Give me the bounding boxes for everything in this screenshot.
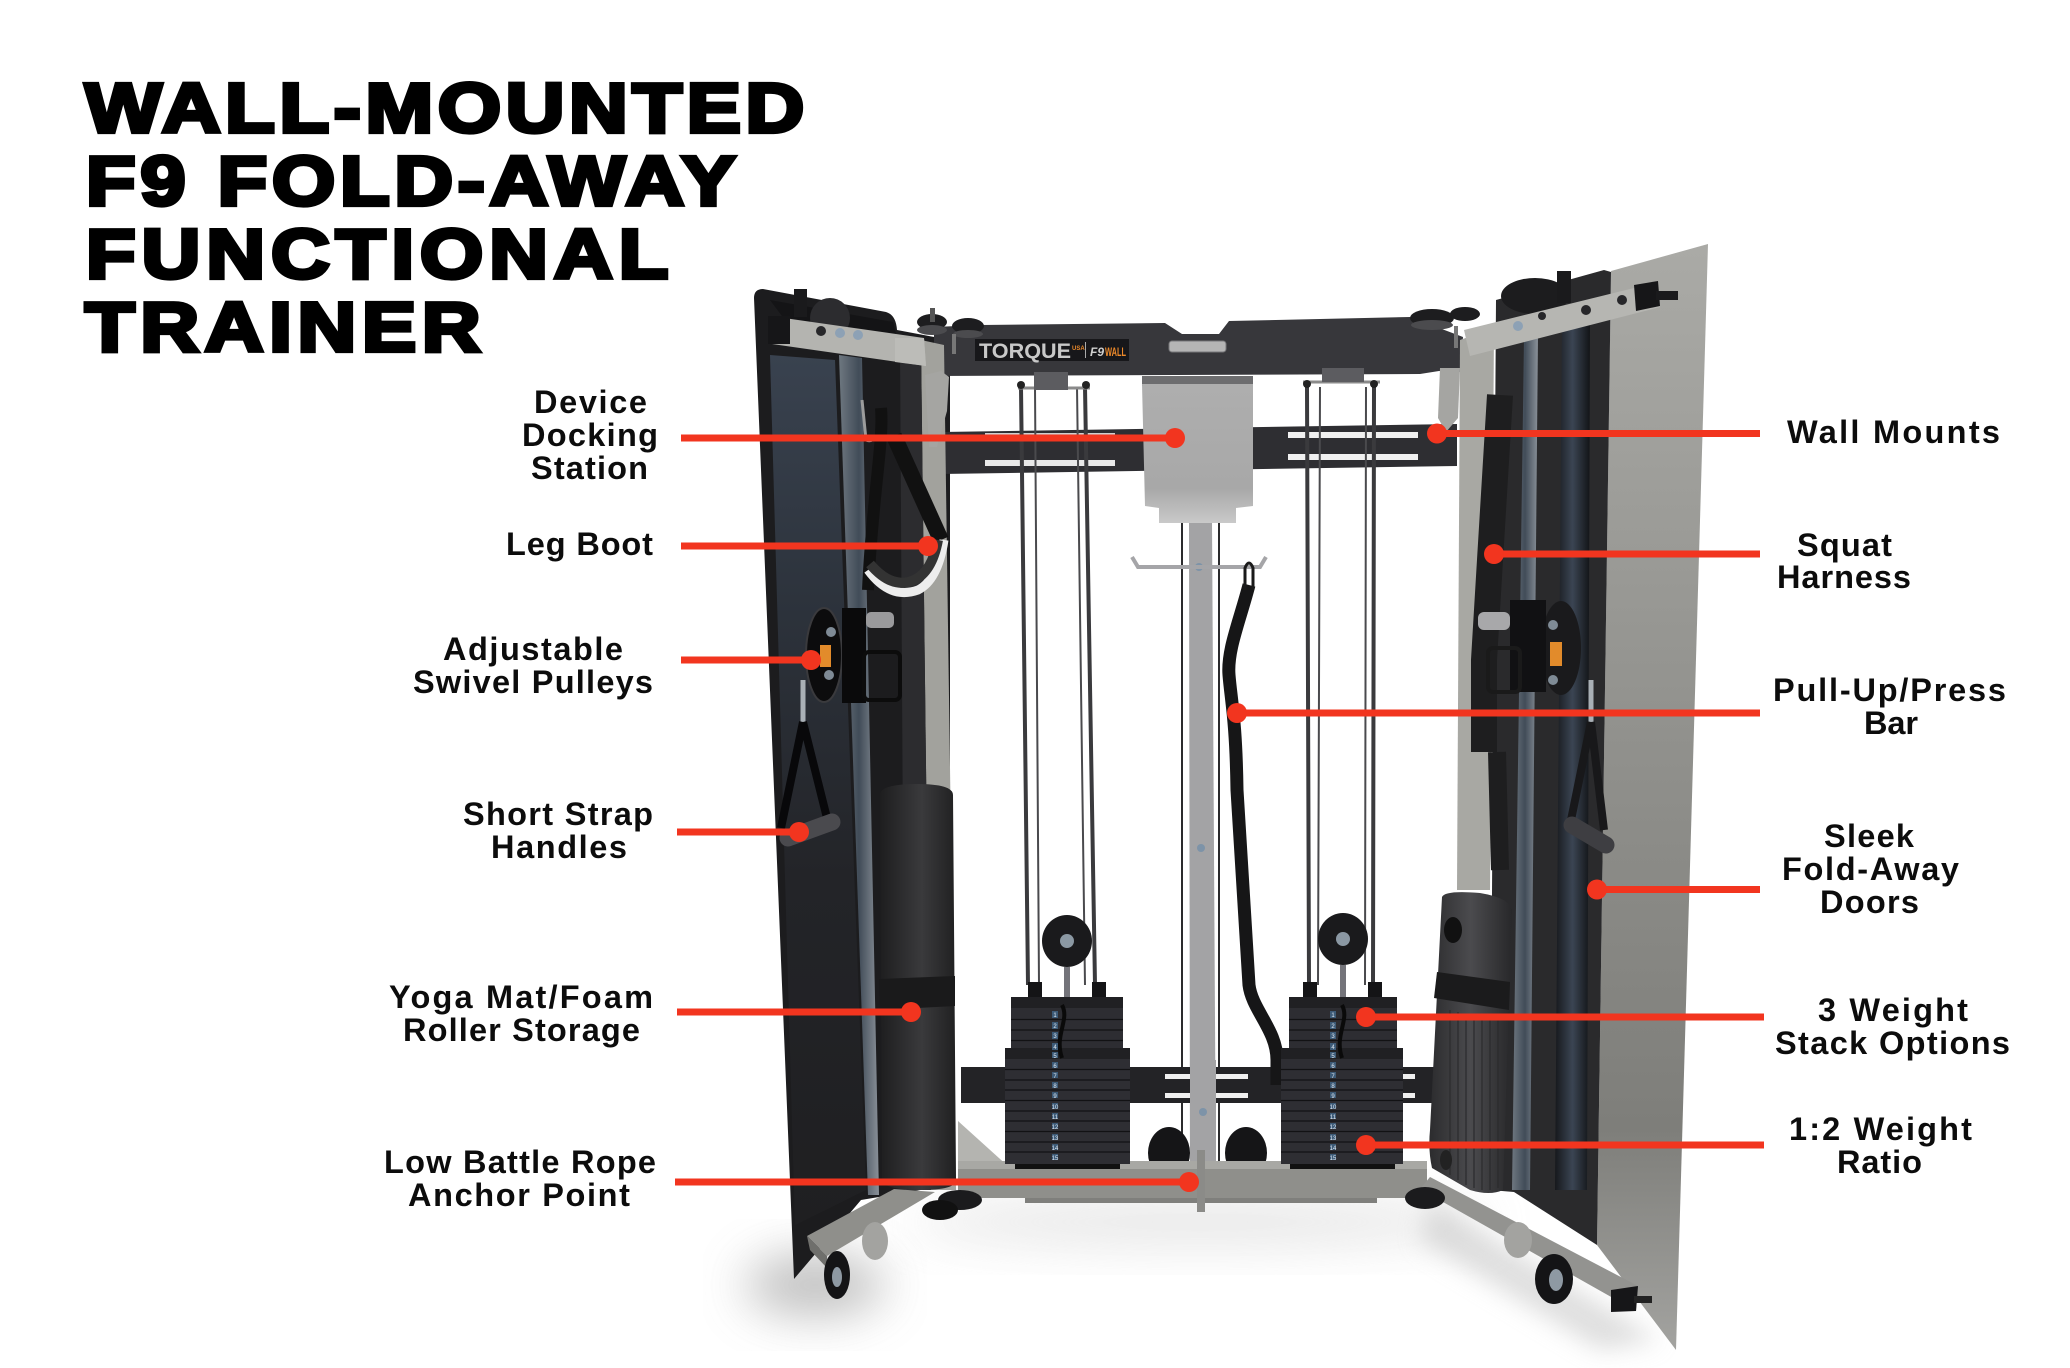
right weight stack: 3 xyxy=(1331,1034,1335,1040)
left weight stack: 12 xyxy=(1052,1125,1059,1131)
right weight stack: 11 xyxy=(1330,1115,1337,1121)
right weight stack: 12 xyxy=(1330,1125,1337,1131)
header bracket xyxy=(934,317,1463,376)
left weight stack: 3 xyxy=(1053,1034,1057,1040)
callout: Pull-Up/Press Bar: Bar xyxy=(1864,705,1918,741)
callout: Squat Harness: Harness xyxy=(1777,559,1911,595)
title: F9 FOLD-AWAY xyxy=(86,142,736,221)
logo plate: USA xyxy=(1072,346,1085,352)
right swivel pulley xyxy=(1478,600,1581,695)
selector pulley right xyxy=(1318,913,1368,997)
short strap handle left xyxy=(781,680,832,838)
right weight stack: 9 xyxy=(1331,1094,1335,1100)
left weight stack: 10 xyxy=(1052,1105,1059,1111)
left weight stack: 5 xyxy=(1053,1054,1057,1060)
short strap handle right xyxy=(1571,680,1606,845)
callout: Sleek Fold-Away Doors: Sleek xyxy=(1824,818,1915,854)
callout: Wall Mounts: Wall Mounts xyxy=(1787,414,2000,450)
callout: Device Docking Station: Device xyxy=(534,384,647,420)
left weight stack: 6 xyxy=(1053,1064,1057,1070)
callout: Leg Boot xyxy=(506,526,938,562)
squat harness xyxy=(1484,395,1500,870)
logo plate xyxy=(975,339,1129,363)
left weight stack: 15 xyxy=(1052,1156,1059,1162)
callout: Short Strap Handles: Short Strap xyxy=(463,796,653,832)
callout: Yoga Mat/Foam Roller Storage: Yoga Mat/Foam xyxy=(389,979,653,1015)
right weight stack: 7 xyxy=(1331,1074,1335,1080)
right column interior xyxy=(1457,278,1590,1190)
right weight stack: 4 xyxy=(1331,1045,1335,1051)
left weight stack xyxy=(1005,997,1130,1169)
right stack rods xyxy=(1303,368,1380,985)
callout: 1:2 Weight Ratio xyxy=(1356,1111,1972,1180)
callout: 3 Weight Stack Options: Stack Options xyxy=(1775,1025,2010,1061)
right weight stack: 14 xyxy=(1330,1146,1337,1152)
right weight stack: 8 xyxy=(1331,1084,1335,1090)
logo plate: F9 xyxy=(1090,345,1104,359)
right weight stack: 5 xyxy=(1331,1054,1335,1060)
callout: Wall Mounts xyxy=(1427,414,2000,450)
right floor beam and caster xyxy=(1405,1177,1652,1312)
left top beam xyxy=(768,289,926,366)
callout: Sleek Fold-Away Doors xyxy=(1587,818,1959,920)
upper wall bracket xyxy=(941,424,1457,474)
callout: Adjustable Swivel Pulleys xyxy=(413,631,821,700)
left weight stack: 1 xyxy=(1053,1013,1057,1019)
right door panel xyxy=(1597,244,1708,1350)
rod sleeves xyxy=(1028,982,1382,1004)
callout: 1:2 Weight Ratio: 1:2 Weight xyxy=(1789,1111,1972,1147)
callout: Yoga Mat/Foam Roller Storage: Roller Storage xyxy=(403,1012,640,1048)
centre post xyxy=(1182,510,1219,1185)
right weight stack: 2 xyxy=(1331,1024,1335,1030)
callout: Device Docking Station: Docking xyxy=(522,417,658,453)
logo plate: WALL xyxy=(1105,345,1126,359)
callout: 3 Weight Stack Options: 3 Weight xyxy=(1818,992,1968,1028)
callout: Short Strap Handles: Handles xyxy=(491,829,627,865)
callout: Short Strap Handles xyxy=(463,796,809,865)
left weight stack: 4 xyxy=(1053,1045,1057,1051)
right weight stack xyxy=(1281,997,1403,1169)
left stack rods xyxy=(1017,372,1095,985)
right top beam xyxy=(1464,271,1678,356)
left weight stack: 14 xyxy=(1052,1146,1059,1152)
title: WALL-MOUNTED xyxy=(85,69,804,148)
left floor beam and caster xyxy=(807,1189,982,1299)
logo plate: TORQUE xyxy=(979,340,1071,363)
leg boot strap xyxy=(868,408,944,592)
bar hook xyxy=(1245,563,1253,590)
lower wall bracket xyxy=(961,1067,1437,1103)
pull-up press bar xyxy=(1229,585,1277,1085)
callout: Low Battle Rope Anchor Point xyxy=(384,1144,1199,1213)
left weight stack: 9 xyxy=(1053,1094,1057,1100)
top pulleys right xyxy=(1410,307,1480,432)
top pulleys left xyxy=(917,308,984,447)
centre post over bracket xyxy=(1190,1060,1216,1185)
callout: Adjustable Swivel Pulleys: Swivel Pulleys xyxy=(413,664,653,700)
right weight stack: 15 xyxy=(1330,1156,1337,1162)
right weight stack: 13 xyxy=(1330,1136,1337,1142)
callout: Sleek Fold-Away Doors: Fold-Away xyxy=(1782,851,1959,887)
callout: Yoga Mat/Foam Roller Storage xyxy=(389,979,921,1048)
selector pulley left xyxy=(1042,915,1092,999)
callout: 3 Weight Stack Options xyxy=(1356,992,2010,1061)
callout: Leg Boot: Leg Boot xyxy=(506,526,653,562)
right weight stack: 6 xyxy=(1331,1064,1335,1070)
callout: Pull-Up/Press Bar xyxy=(1227,672,2006,741)
device docking station xyxy=(1142,376,1253,523)
header handle xyxy=(1169,341,1226,352)
callout: Adjustable Swivel Pulleys: Adjustable xyxy=(443,631,623,667)
callout: Sleek Fold-Away Doors: Doors xyxy=(1820,884,1919,920)
right door dark inner panel xyxy=(1490,270,1611,1245)
callout: Squat Harness: Squat xyxy=(1797,527,1892,563)
callout: Pull-Up/Press Bar: Pull-Up/Press xyxy=(1773,672,2006,708)
left weight stack: 8 xyxy=(1053,1084,1057,1090)
yoga mat xyxy=(1429,892,1512,1193)
callout: Device Docking Station: Station xyxy=(531,450,648,486)
left column interior xyxy=(770,298,956,1225)
callout: Device Docking Station xyxy=(522,384,1185,486)
left weight stack: 2 xyxy=(1053,1024,1057,1030)
floor shadow xyxy=(745,1198,1660,1350)
left weight stack: 11 xyxy=(1052,1115,1059,1121)
left weight stack: 13 xyxy=(1052,1136,1059,1142)
accessory hook bar xyxy=(1132,557,1266,567)
right weight stack: 1 xyxy=(1331,1013,1335,1019)
callout: Squat Harness xyxy=(1484,527,1911,595)
title: TRAINER xyxy=(85,288,481,367)
title xyxy=(85,69,804,367)
callout: Low Battle Rope Anchor Point: Low Battle Rope xyxy=(384,1144,656,1180)
left weight stack: 7 xyxy=(1053,1074,1057,1080)
right weight stack: 10 xyxy=(1330,1105,1337,1111)
foam roller xyxy=(879,784,956,1190)
product photo: functional trainer xyxy=(754,244,1708,1350)
callout: Low Battle Rope Anchor Point: Anchor Point xyxy=(408,1177,630,1213)
left door panel xyxy=(754,289,950,1279)
callout: 1:2 Weight Ratio: Ratio xyxy=(1837,1144,1922,1180)
left swivel pulley xyxy=(806,608,900,703)
title: FUNCTIONAL xyxy=(86,215,668,294)
base frame xyxy=(958,1121,1427,1212)
